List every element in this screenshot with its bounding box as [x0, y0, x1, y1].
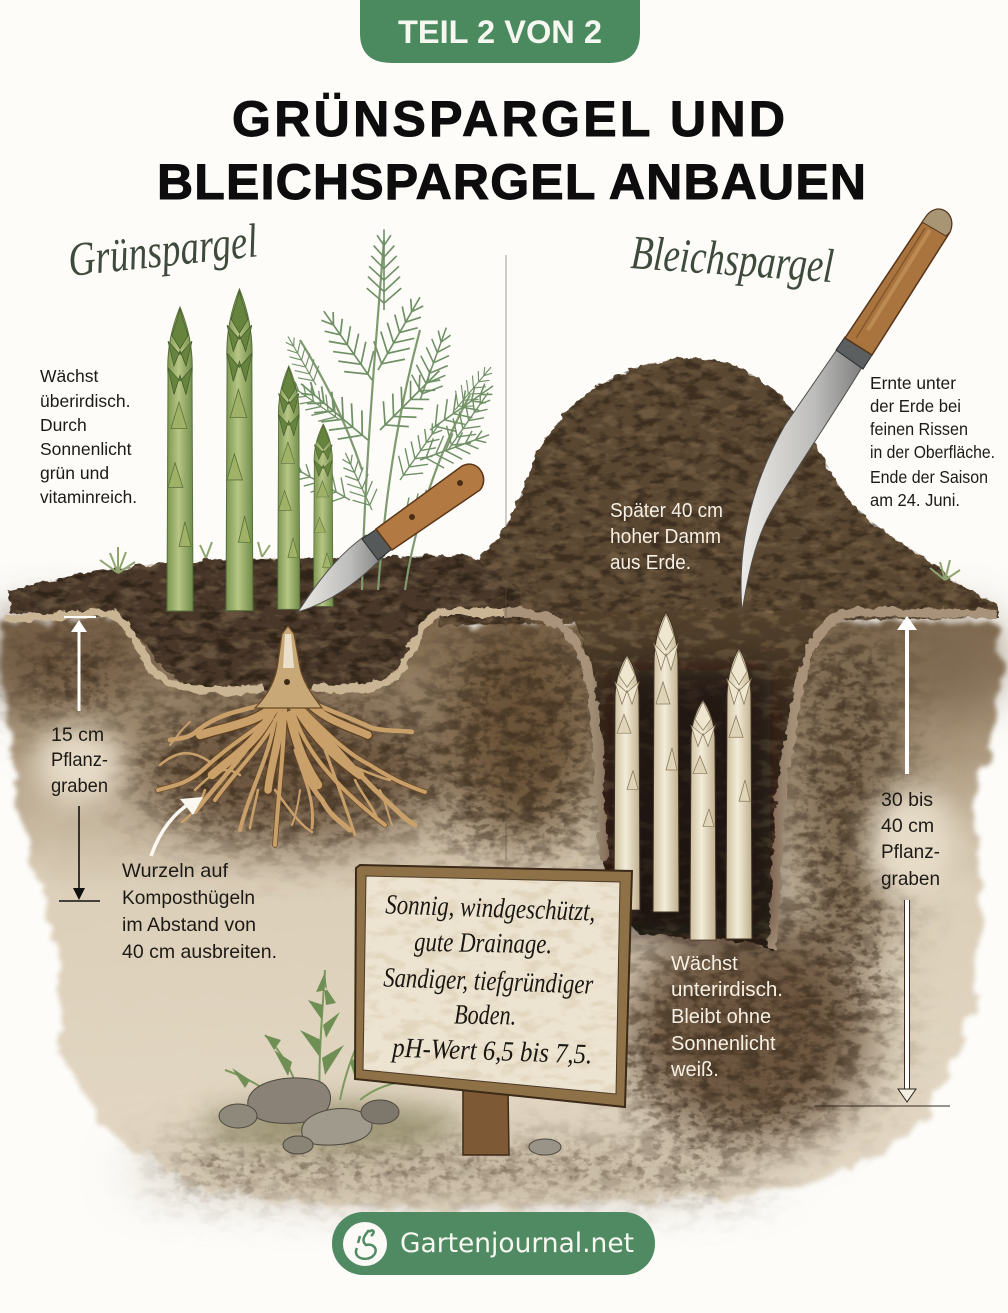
grass tufts on the surface — [100, 542, 960, 580]
note: Grünspargel growth: grün und — [40, 463, 109, 483]
title: GRÜNSPARGEL UND — [232, 91, 785, 147]
speckled soil texture, fading outward — [20, 630, 900, 1180]
note: Wurzeln auf Komposthügeln: Wurzeln auf — [122, 860, 229, 882]
topsoil band and left planting trench — [4, 555, 520, 692]
note: Damm aus Erde: Später 40 cm — [610, 500, 723, 522]
heading: Bleichspargel: Bleichspargel — [629, 226, 835, 293]
note: Damm aus Erde: hoher Damm — [610, 526, 721, 548]
sign text: gute Drainage. — [414, 927, 552, 960]
divider line between the two methods — [505, 255, 507, 860]
dimension arrow: 30 bis 40 cm Pflanzgraben: 40 cm — [881, 815, 934, 837]
note: Wurzeln auf Komposthügeln: Komposthügeln — [122, 887, 255, 909]
note: Grünspargel growth: Durch — [40, 415, 87, 435]
note: Wächst unterirdisch: Bleibt ohne — [671, 1006, 771, 1028]
asparagus crown and roots — [158, 626, 425, 845]
dimension arrow: 15 cm Pflanzgraben: graben — [51, 775, 108, 797]
light backing behind the dimension labels — [34, 725, 958, 903]
note: Grünspargel growth: überirdisch. — [40, 391, 130, 411]
note: Ernte unter der Erde — [870, 373, 995, 510]
subsoil cross-section — [0, 620, 1000, 1210]
note: Wächst unterirdisch: Sonnenlicht — [671, 1033, 776, 1055]
note: Ernte unter der Erde: Ende der Saison — [870, 467, 988, 487]
large knife in the mound — [741, 209, 952, 612]
fern: asparagus foliage — [278, 230, 503, 590]
note: Wächst unterirdisch: weiß. — [670, 1059, 719, 1081]
title: BLEICHSPARGEL ANBAUEN — [157, 154, 866, 210]
wooden sign — [355, 865, 632, 1155]
note: Ernte unter der Erde: in der Oberfläche. — [870, 442, 995, 462]
mound of soil: Bleichspargel — [440, 358, 998, 625]
header badge: Teil 2 von 2 — [360, 0, 640, 63]
note: Wurzeln auf Komposthügeln: 40 cm ausbreiten. — [122, 941, 277, 963]
sign text — [383, 889, 596, 1070]
sign post — [463, 1090, 509, 1155]
sign text: Sandiger, tiefgründiger — [383, 962, 594, 1001]
note: Ernte unter der Erde: feinen Rissen — [870, 419, 968, 439]
note: Ernte unter der Erde: Ernte unter — [870, 373, 956, 393]
note: Damm aus Erde — [610, 500, 723, 574]
dimension arrow: 15 cm Pflanzgraben: Pflanz- — [51, 749, 108, 771]
note: Wurzeln auf Komposthügeln — [122, 860, 277, 963]
note: Wächst unterirdisch: Wächst — [671, 953, 738, 975]
dimension arrow: 30 bis 40 cm Pflanzgraben: 30 bis — [881, 789, 933, 811]
note: Grünspargel growth: Sonnenlicht — [40, 439, 132, 459]
dimension arrow: 30 bis 40 cm Pflanzgraben: graben — [881, 868, 940, 890]
note: Grünspargel growth — [40, 366, 137, 507]
note: Wächst unterirdisch: unterirdisch. — [671, 979, 783, 1001]
note: Damm aus Erde: aus Erde. — [610, 552, 691, 574]
header badge: Teil 2 von 2: TEIL 2 VON 2 — [398, 14, 602, 50]
darker soil zones — [0, 620, 1000, 1192]
dimension arrow: 15 cm Pflanzgraben — [51, 617, 108, 901]
ground with plant and stones — [200, 970, 561, 1155]
note: Ernte unter der Erde: am 24. Juni. — [870, 490, 960, 510]
note: Ernte unter der Erde: der Erde bei — [870, 396, 961, 416]
curved arrow to roots — [151, 797, 203, 856]
footer badge: Gartenjournal.net — [332, 1212, 655, 1275]
white asparagus spears — [614, 612, 752, 940]
green asparagus spears — [167, 289, 333, 611]
dimension arrow: 15 cm Pflanzgraben: 15 cm — [51, 724, 104, 746]
right planting trench — [504, 610, 996, 953]
note: Grünspargel growth: vitaminreich. — [40, 487, 137, 507]
dimension arrow: 30 bis 40 cm Pflanzgraben: Pflanz- — [881, 841, 940, 863]
note: Wurzeln auf Komposthügeln: im Abstand von — [122, 914, 256, 936]
sign text: Sonnig, windgeschützt, — [385, 889, 596, 928]
icon: logo sprout — [343, 1222, 387, 1266]
sign text: pH-Wert 6,5 bis 7,5. — [390, 1032, 593, 1070]
footer badge: Gartenjournal.net: Gartenjournal.net — [400, 1228, 634, 1259]
title — [157, 91, 866, 210]
note: Grünspargel growth: Wächst — [40, 366, 98, 386]
sign text: Boden. — [454, 999, 516, 1032]
note: Wächst unterirdisch — [670, 953, 783, 1081]
small knife at crown — [298, 464, 484, 612]
heading: Grünspargel: Grünspargel — [66, 214, 260, 287]
dimension arrow: 30 bis 40 cm Pflanzgraben — [815, 616, 950, 1106]
